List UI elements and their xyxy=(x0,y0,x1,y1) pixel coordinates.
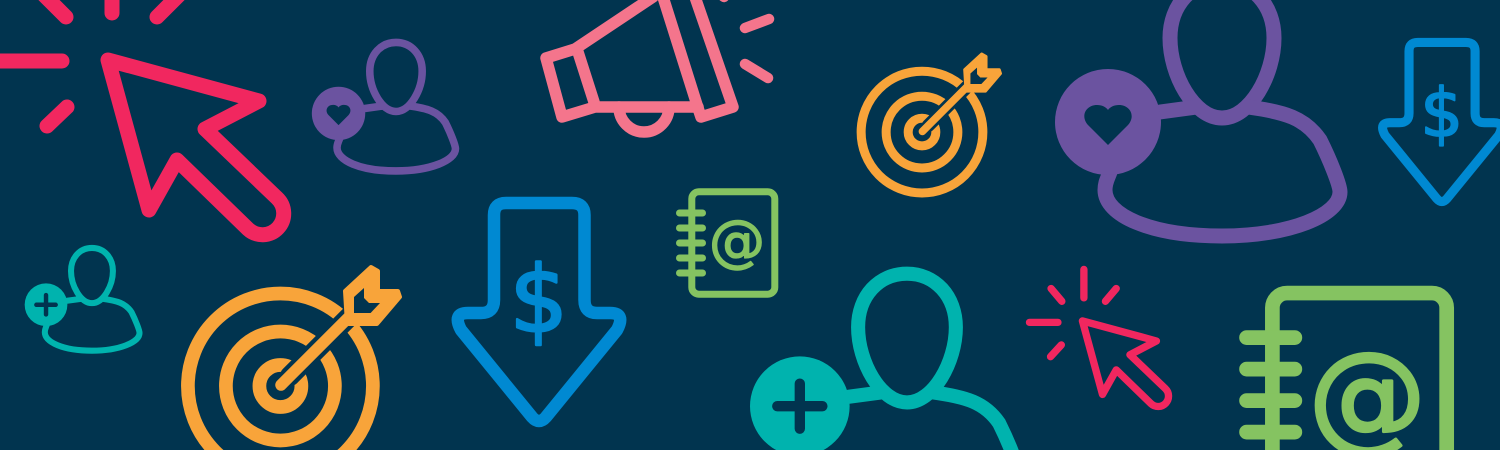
icon: large orange target with arrow xyxy=(188,267,400,450)
icon: large teal person with plus xyxy=(750,274,1018,450)
icon: pink megaphone xyxy=(546,0,769,132)
icon: small orange target with arrow xyxy=(861,54,1001,193)
icon: small blue down arrow with dollar xyxy=(1383,42,1500,202)
icon: large purple person with heart xyxy=(1055,0,1340,236)
icon: large blue down arrow with dollar xyxy=(458,203,620,421)
icon: small blue down arrow with dollar: $ xyxy=(1420,74,1463,152)
icon: large pink cursor with click rays xyxy=(0,0,284,235)
icon: small green address book: @ xyxy=(709,209,765,274)
icon: large green address book xyxy=(1247,293,1447,450)
icon: small pink cursor with click rays xyxy=(1030,269,1169,407)
icon: small teal person with plus xyxy=(25,248,140,351)
icon: large blue down arrow with dollar: $ xyxy=(510,246,568,354)
icon: small green address book xyxy=(680,192,775,294)
icon: small purple person with heart xyxy=(312,42,455,171)
